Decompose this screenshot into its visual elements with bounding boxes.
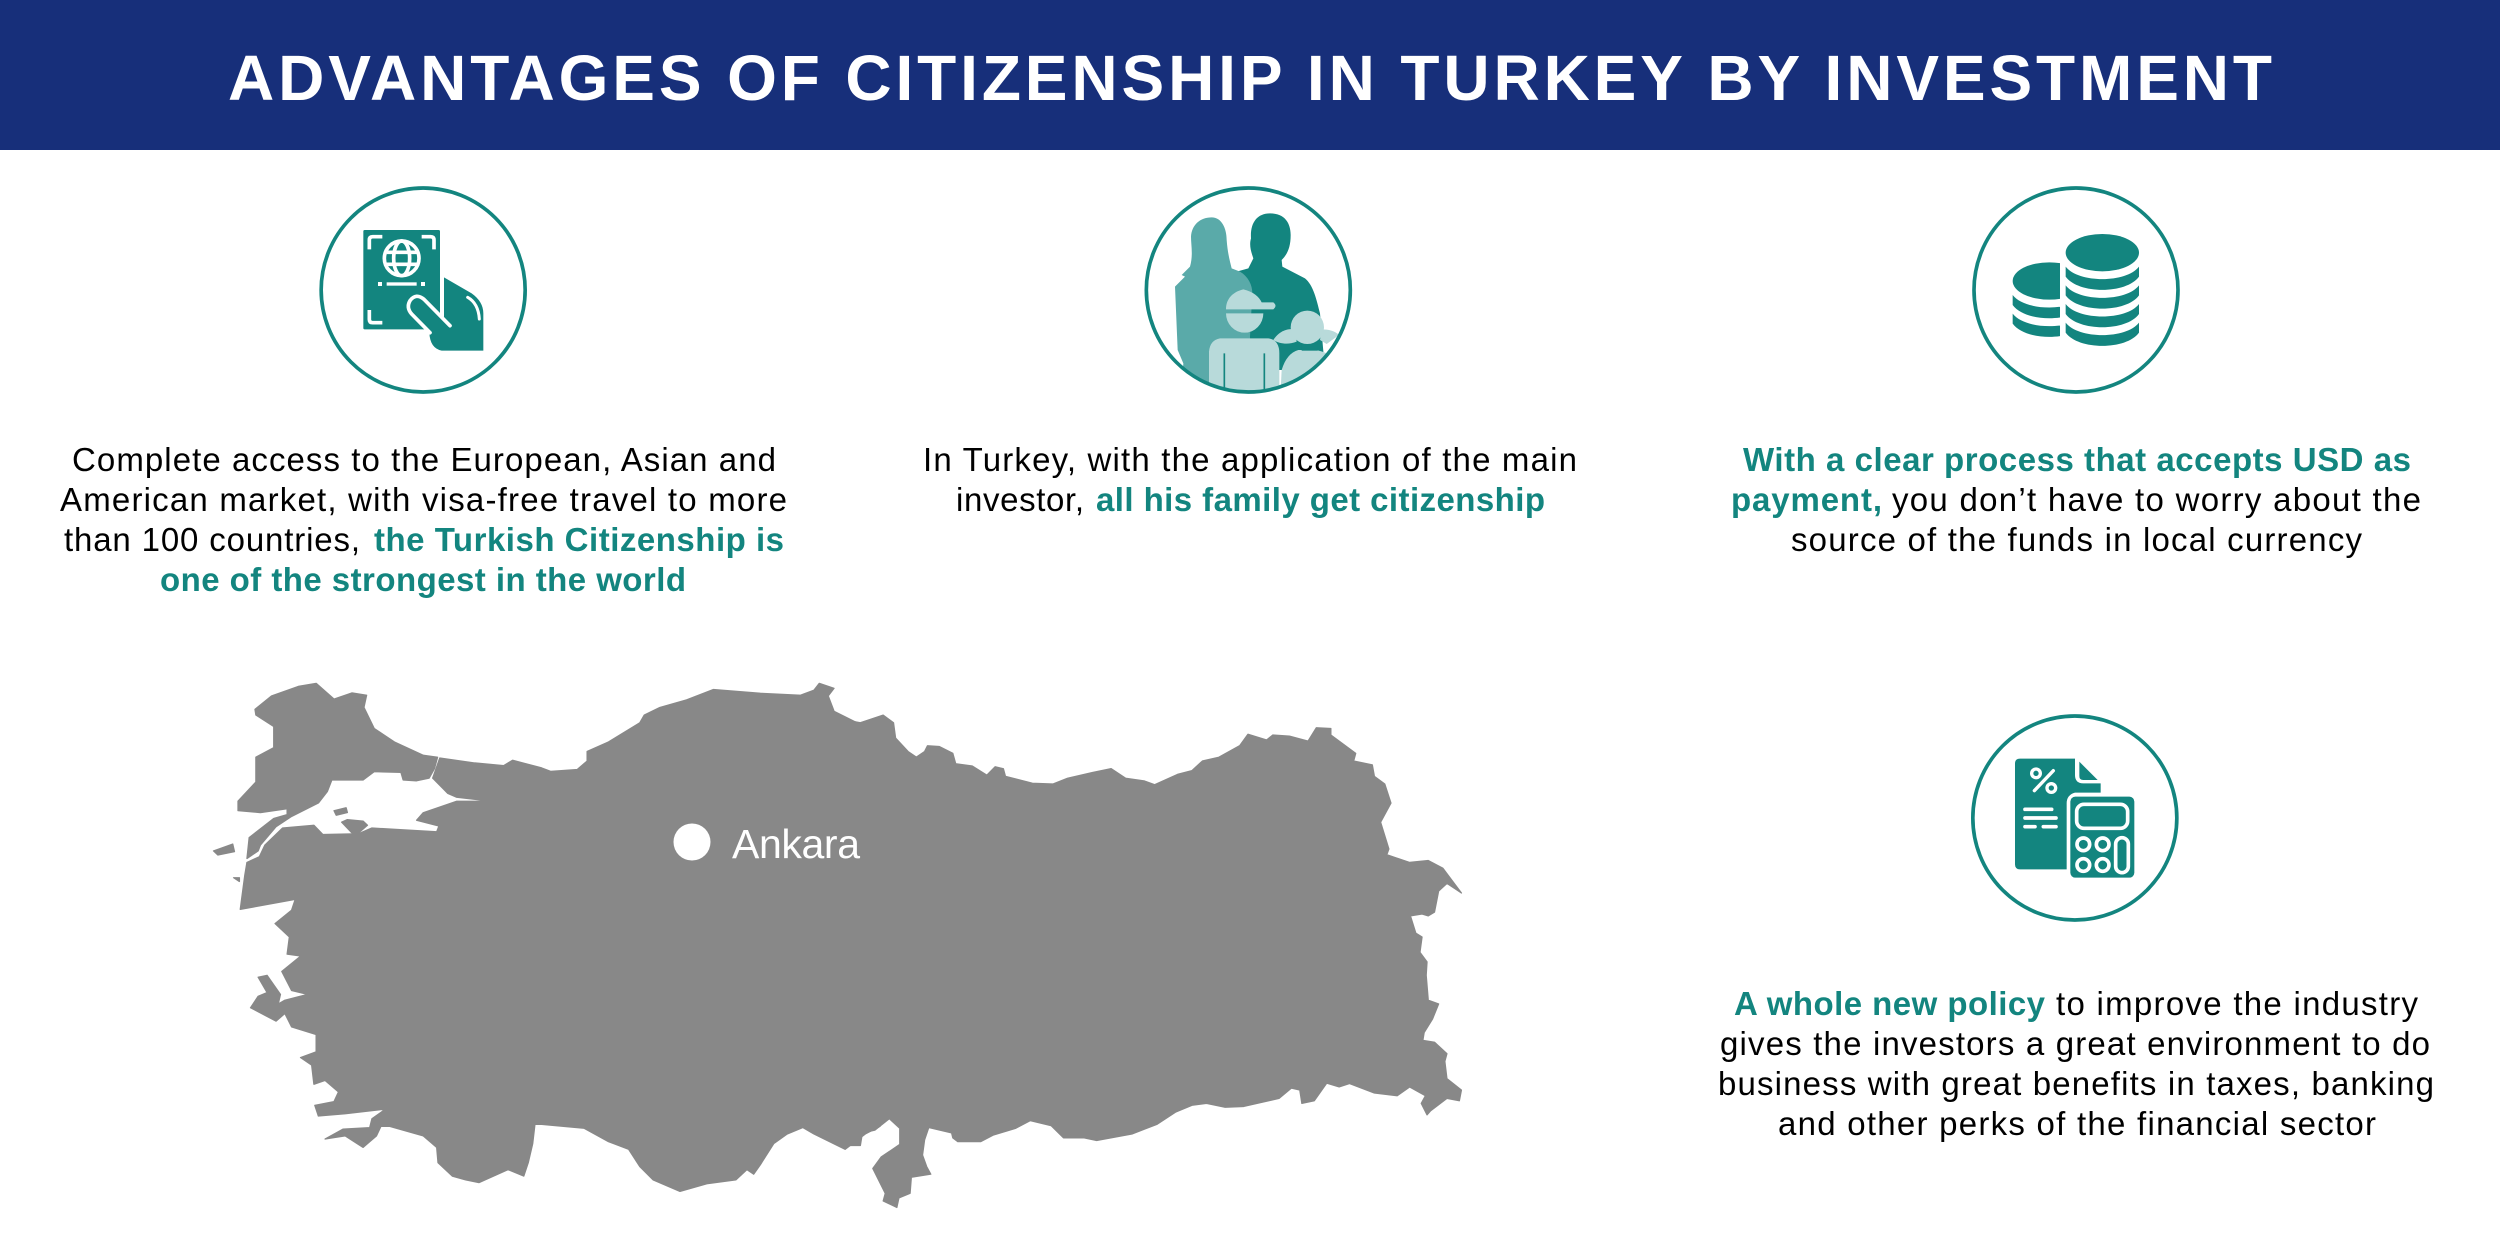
text block: USD payment: you don’t have to worry about the (1892, 481, 2421, 518)
text block: policy: and other perks of the financial sector (1778, 1105, 2376, 1142)
text block: policy: A whole new policy (1734, 985, 2046, 1022)
text block: policy: gives the investors a great environment to do (1720, 1025, 2430, 1062)
text block: policy (1718, 985, 2434, 1142)
text block: access: the Turkish Citizenship is (374, 521, 784, 558)
text block: family (923, 441, 1577, 518)
text block: USD payment (1731, 441, 2421, 558)
text block: access: one of the strongest in the world (160, 561, 686, 598)
text block: family: all his family get citizenship (1096, 481, 1545, 518)
text block: access: than 100 countries, (64, 521, 360, 558)
text block: family: In Turkey, with the application of the main (923, 441, 1577, 478)
text block: policy: to improve the industry (2056, 985, 2418, 1022)
text block: USD payment: With a clear process that accepts USD as (1743, 441, 2411, 478)
title: ADVANTAGES OF CITIZENSHIP IN TURKEY BY INVESTMENT (228, 42, 2272, 114)
text block: access: American market, with visa-free travel to more (60, 481, 787, 518)
marker: Ankara: Ankara (732, 821, 860, 867)
text block: family: investor, (956, 481, 1084, 518)
text block: policy: business with great benefits in taxes, banking (1718, 1065, 2434, 1102)
icon: coins (1974, 188, 2178, 392)
marker: Ankara (674, 821, 860, 867)
text block: USD payment: payment, (1731, 481, 1882, 518)
icon: family (1146, 188, 1350, 400)
icon: passport (321, 188, 525, 392)
text block: USD payment: source of the funds in local currency (1791, 521, 2362, 558)
text block: access (60, 441, 787, 598)
map of Turkey (213, 683, 1461, 1208)
icon: tax document and calculator (1973, 716, 2177, 920)
text block: access: Complete access to the European, Asian and (72, 441, 776, 478)
title banner (0, 0, 2500, 150)
